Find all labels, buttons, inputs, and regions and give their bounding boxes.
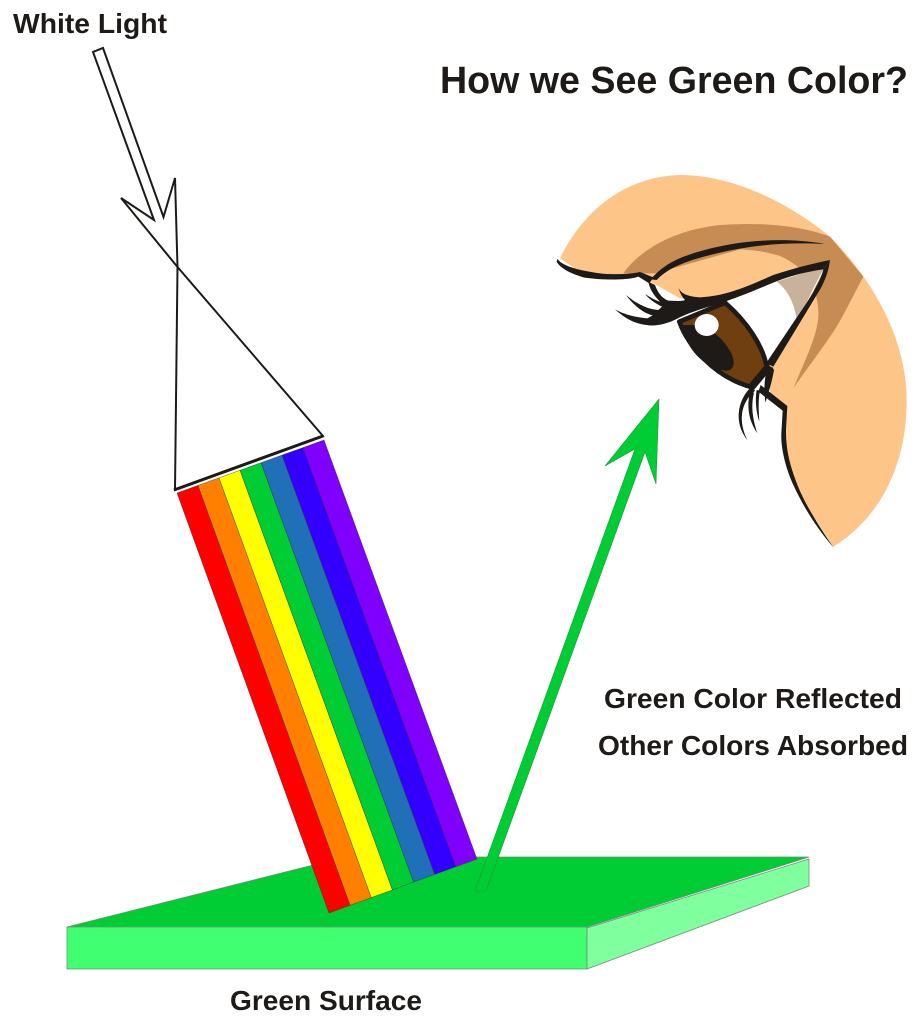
label: white light: White Light: [13, 8, 167, 39]
surface: front face: [67, 927, 587, 969]
upper eyelid and lashes: [615, 260, 830, 325]
arrow: reflected green light: [475, 399, 659, 891]
band: orange: [198, 478, 371, 905]
lash cluster base: [749, 363, 772, 391]
forehead outline: [557, 259, 653, 283]
outer lash: [739, 387, 755, 440]
label: other colors absorbed: Other Colors Absorbed: [598, 730, 908, 761]
lower lashes: [739, 363, 774, 440]
lash spike: [764, 367, 774, 403]
green surface block: [67, 857, 809, 969]
iris: [679, 303, 767, 387]
outer eye edge: [766, 260, 830, 367]
arrow: white light: [93, 48, 178, 267]
title: How we See Green Color?: [440, 59, 908, 101]
prism base edge: [174, 436, 323, 490]
label: green color reflected: Green Color Reflected: [604, 683, 902, 714]
band: red: [177, 485, 350, 913]
eye highlight: [695, 314, 719, 336]
face profile line: [758, 385, 834, 548]
eyelid shadow: [623, 224, 863, 388]
eye and face illustration: [557, 175, 907, 548]
face skin: [560, 175, 907, 547]
inner lash: [756, 390, 760, 422]
middle lash: [748, 392, 757, 433]
brow fold line: [651, 240, 825, 280]
band: blue: [261, 455, 435, 882]
band: indigo: [282, 448, 456, 874]
surface: side face: [587, 859, 809, 969]
prism and white light arrow: [93, 48, 323, 490]
band: green: [240, 463, 414, 890]
eye corner shade: [777, 266, 825, 323]
rainbow spectrum beam: [177, 440, 477, 913]
band: violet: [303, 440, 477, 867]
pupil: [682, 325, 734, 371]
eye white: [722, 265, 827, 367]
surface: top face: [67, 857, 809, 927]
label: green surface: Green Surface: [230, 985, 422, 1016]
prism: [175, 267, 323, 490]
band: yellow: [219, 470, 392, 898]
